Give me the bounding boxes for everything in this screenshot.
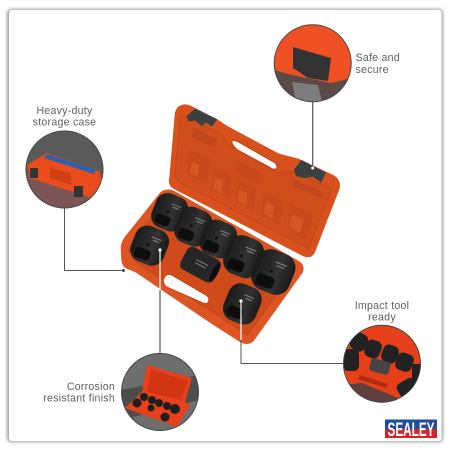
icon: latch photo: [274, 24, 352, 102]
callout line: safe and secure: [311, 102, 314, 170]
product: open socket case: [121, 104, 340, 344]
socket row: [126, 189, 300, 328]
callout line: corrosion resistant: [158, 248, 162, 354]
circle outlines: [26, 25, 420, 431]
label: impact tool: Impact tool: [355, 300, 409, 312]
label: corrosion resistant: Corrosion: [67, 381, 115, 393]
tray handle opening: [163, 274, 209, 303]
label: impact tool: ready: [368, 312, 396, 324]
label: storage case: storage case: [33, 116, 96, 128]
icon: open case photo: [121, 353, 199, 431]
case tray: [121, 189, 304, 344]
icon: sockets photo: [343, 325, 421, 403]
icon: storage case photo: [26, 131, 104, 209]
latch right: [294, 160, 326, 183]
label: corrosion resistant: resistant finish: [43, 392, 115, 404]
label: storage case: Heavy-duty: [36, 105, 93, 117]
callout line: storage case: [64, 208, 125, 272]
callout line: impact tool: [239, 299, 344, 364]
label: safe and secure: secure: [356, 64, 389, 76]
lid handle opening: [232, 140, 277, 169]
label: safe and secure: Safe and: [356, 52, 400, 64]
case lid: [169, 104, 340, 257]
latch left: [187, 109, 217, 127]
